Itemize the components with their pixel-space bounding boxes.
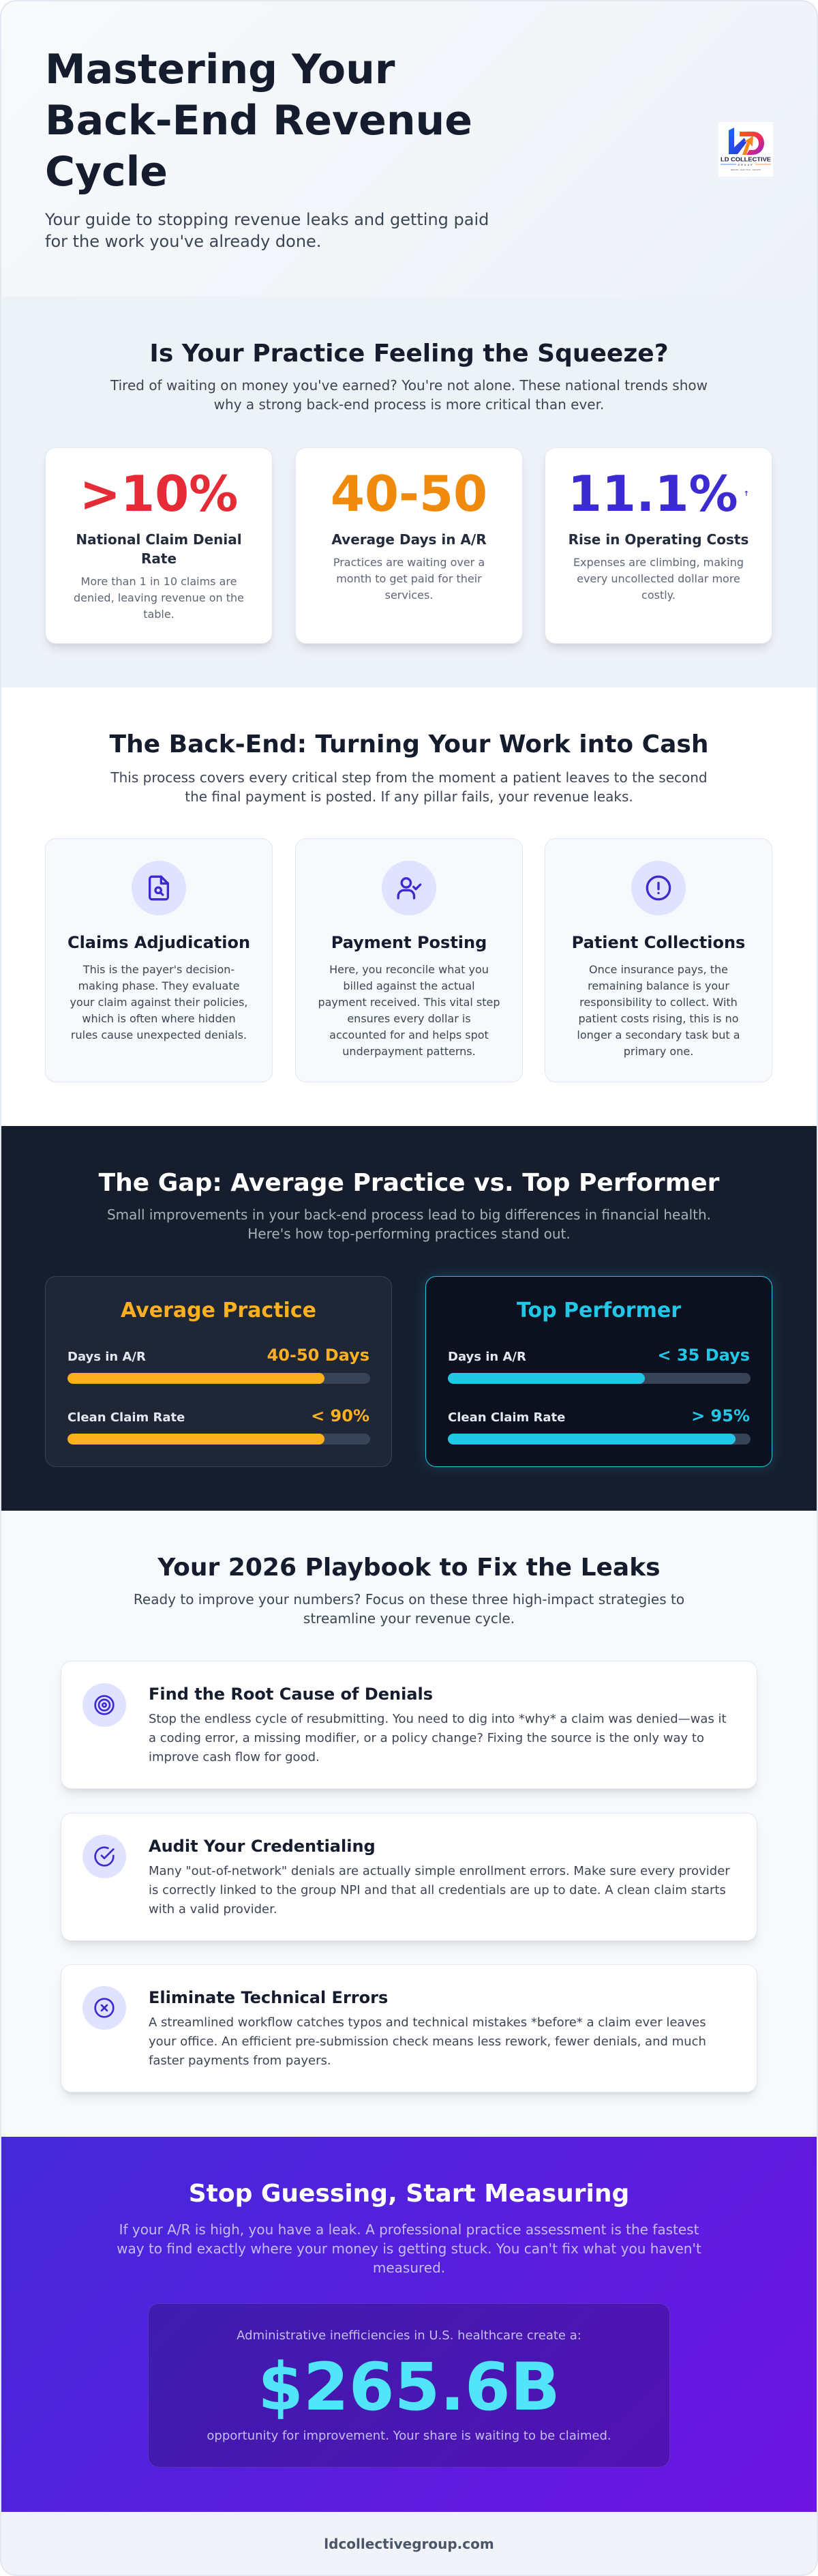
pillar description: Once insurance pays, the [589,963,728,976]
icon: LD Collective Group logo: LD COLLECTIVE [721,157,772,162]
metric: days in A/R: 40-50 Days [267,1346,369,1365]
intro text: Tired of waiting on money you've earned? You're not alone. These national trends show [110,377,708,394]
intro text: Ready to improve your numbers? Focus on these three high-impact strategies to [134,1591,684,1608]
pillar description [577,963,740,1058]
stat description: Practices are waiting over a [333,556,485,569]
strategy description: Stop the endless cycle of resubmitting. You need to dig into *why* a claim was denied—was it [149,1712,727,1726]
stat value: >10% [80,465,238,522]
metric: days in A/R: < 35 Days [657,1346,750,1365]
pillar description: rules cause unexpected denials. [71,1028,247,1041]
strategy card: technical errors [61,1964,757,2092]
panel: claims adjudication [45,838,273,1082]
stat card: operating costs [545,447,772,644]
pillar description: remaining balance is your [588,979,729,992]
stat description: month to get paid for their [336,572,482,585]
strategy description: Many "out-of-network" denials are actually simple enrollment errors. Make sure every provider [149,1864,730,1878]
pillar description: primary one. [624,1045,693,1058]
intro text: If your A/R is high, you have a leak. A professional practice assessment is the fastest [119,2221,699,2238]
section: the gap [0,1126,818,1511]
icon: LD Collective Group logo [718,122,773,177]
strategy card: root cause [61,1661,757,1789]
panel: payment posting [295,838,523,1082]
intro text: Here's how top-performing practices stand out. [247,1226,571,1242]
strategy description [149,1712,727,1764]
pillar title: Claims Adjudication [67,933,250,952]
pillar title: Patient Collections [572,933,745,952]
metric: clean claim rate [448,1406,751,1445]
metric: days in A/R: Days in A/R [67,1350,146,1364]
stat description [74,575,244,621]
strategy description: your office. An efficient pre-submission check means less rework, fewer denials, and much [149,2034,706,2049]
intro text [107,1206,711,1242]
pillar description: making phase. They evaluate [78,979,239,992]
stat title: Rise in Operating Costs [569,531,748,548]
stat title: Average Days in A/R [331,531,487,548]
intro text: way to find exactly where your money is getting stuck. You can't fix what you haven't [117,2240,701,2257]
intro text: the final payment is posted. If any pillar fails, your revenue leaks. [185,788,633,805]
section: call to action [0,2137,818,2513]
strategy description [149,2015,706,2068]
heading: The Gap: Average Practice vs. Top Performer [99,1169,719,1197]
strategy title: Find the Root Cause of Denials [149,1685,433,1704]
metric: days in A/R: Days in A/R [448,1350,526,1364]
pillar description: responsibility to collect. With [579,996,738,1009]
callout lead-in: Administrative inefficiencies in U.S. healthcare create a: [237,2328,581,2343]
heading: Your 2026 Playbook to Fix the Leaks [157,1554,661,1582]
subtitle [45,210,489,251]
stat description: services. [385,589,433,602]
panel title: Top Performer [517,1299,681,1322]
callout value: $265.6B [258,2349,560,2425]
intro text: why a strong back-end process is more critical than ever. [214,396,604,413]
icon: user check [382,861,436,915]
stat value: 40-50 [331,465,487,522]
stat description: every uncollected dollar more [577,572,740,585]
intro text [110,377,708,413]
intro text: This process covers every critical step from the moment a patient leaves to the second [110,769,708,786]
stat description [333,556,485,602]
intro text [110,769,708,805]
pillar description: longer a secondary task but a [577,1028,740,1041]
icon: target [82,1683,126,1727]
callout note: opportunity for improvement. Your share is waiting to be claimed. [207,2429,611,2443]
strategy description [149,1864,730,1916]
pillar description [70,963,247,1041]
footer [0,2512,818,2576]
strategy description: is correctly linked to the group NPI and that all credentials are up to date. A clean claim starts [149,1883,726,1897]
stat description [573,556,744,602]
icon: alert circle [631,861,686,915]
strategy description: faster payments from payers. [149,2054,331,2068]
metric: days in A/R [67,1346,370,1384]
stat card: days in A/R [295,447,523,644]
icon: LD Collective Group logo: GROUP [738,164,754,166]
intro text [117,2221,701,2276]
panel title: Average Practice [121,1299,316,1322]
strategy title: Audit Your Credentialing [149,1837,376,1856]
intro text [134,1591,684,1627]
stat title: National Claim Denial [76,531,242,548]
title: Back-End Revenue [45,97,472,145]
title: Mastering Your [45,46,395,93]
metric: clean claim rate [67,1406,370,1445]
panel: patient collections [545,838,772,1082]
stat description: Expenses are climbing, making [573,556,744,569]
pillar description: This is the payer's decision- [83,963,234,976]
strategy description: A streamlined workflow catches typos and technical mistakes *before* a claim ever leaves [149,2015,706,2030]
stat description: denied, leaving revenue on the [74,591,244,604]
pillar description [318,963,500,1058]
subtitle: Your guide to stopping revenue leaks and getting paid [45,210,489,229]
stat value: 11.1% ↑ [568,465,749,522]
stat description: More than 1 in 10 claims are [81,575,237,588]
stat card: claim denial rate [45,447,273,644]
pillar title: Payment Posting [331,933,487,952]
intro text: Small improvements in your back-end process lead to big differences in financial health. [107,1206,711,1223]
metric: clean claim rate: Clean Claim Rate [448,1410,565,1425]
pillar description: accounted for and helps spot [329,1028,489,1041]
section: playbook [0,1511,818,2138]
callout: opportunity [148,2303,670,2468]
strategy card: credentialing [61,1813,757,1941]
pillar description: patient costs rising, this is no [578,1012,739,1025]
intro text: streamline your revenue cycle. [303,1610,515,1627]
stat title: Rate [141,550,177,567]
subtitle: for the work you've already done. [45,232,321,251]
icon: check circle [82,1835,126,1878]
heading: Stop Guessing, Start Measuring [189,2180,629,2208]
stat description: costly. [641,589,676,602]
metric: clean claim rate: Clean Claim Rate [67,1410,185,1425]
pillar description: billed against the actual [343,979,475,992]
strategy description: a coding error, a missing modifier, or a policy change? Fixing the source is the only way to [149,1731,704,1745]
panel: top performer [425,1276,772,1467]
icon: LD Collective Group logo: REPORT · ANALYTICS · GROWTH [731,168,761,171]
heading: The Back-End: Turning Your Work into Cash [110,730,708,758]
title: Cycle [45,148,168,196]
strategy description: improve cash flow for good. [149,1750,320,1764]
title [45,46,472,196]
panel: average practice [45,1276,392,1467]
icon: x circle [82,1986,126,2030]
pillar description: your claim against their policies, [70,996,247,1009]
strategy description: with a valid provider. [149,1902,277,1916]
section: the squeeze [0,297,818,687]
strategy title: Eliminate Technical Errors [149,1988,388,2007]
stat title [76,531,242,567]
header section [0,0,818,298]
pillar description: payment received. This vital step [318,996,500,1009]
metric: clean claim rate: < 90% [311,1406,369,1425]
pillar description: which is often where hidden [82,1012,236,1025]
metric: clean claim rate: > 95% [691,1406,750,1425]
icon: document search [132,861,186,915]
website: ldcollectivegroup.com [324,2536,494,2552]
section: back-end pillars [0,687,818,1127]
metric: days in A/R [448,1346,751,1384]
pillar description: Here, you reconcile what you [329,963,489,976]
pillar description: underpayment patterns. [342,1045,476,1058]
stat description: table. [143,608,175,621]
intro text: measured. [373,2260,445,2276]
pillar description: ensures every dollar is [347,1012,471,1025]
heading: Is Your Practice Feeling the Squeeze? [149,340,669,368]
